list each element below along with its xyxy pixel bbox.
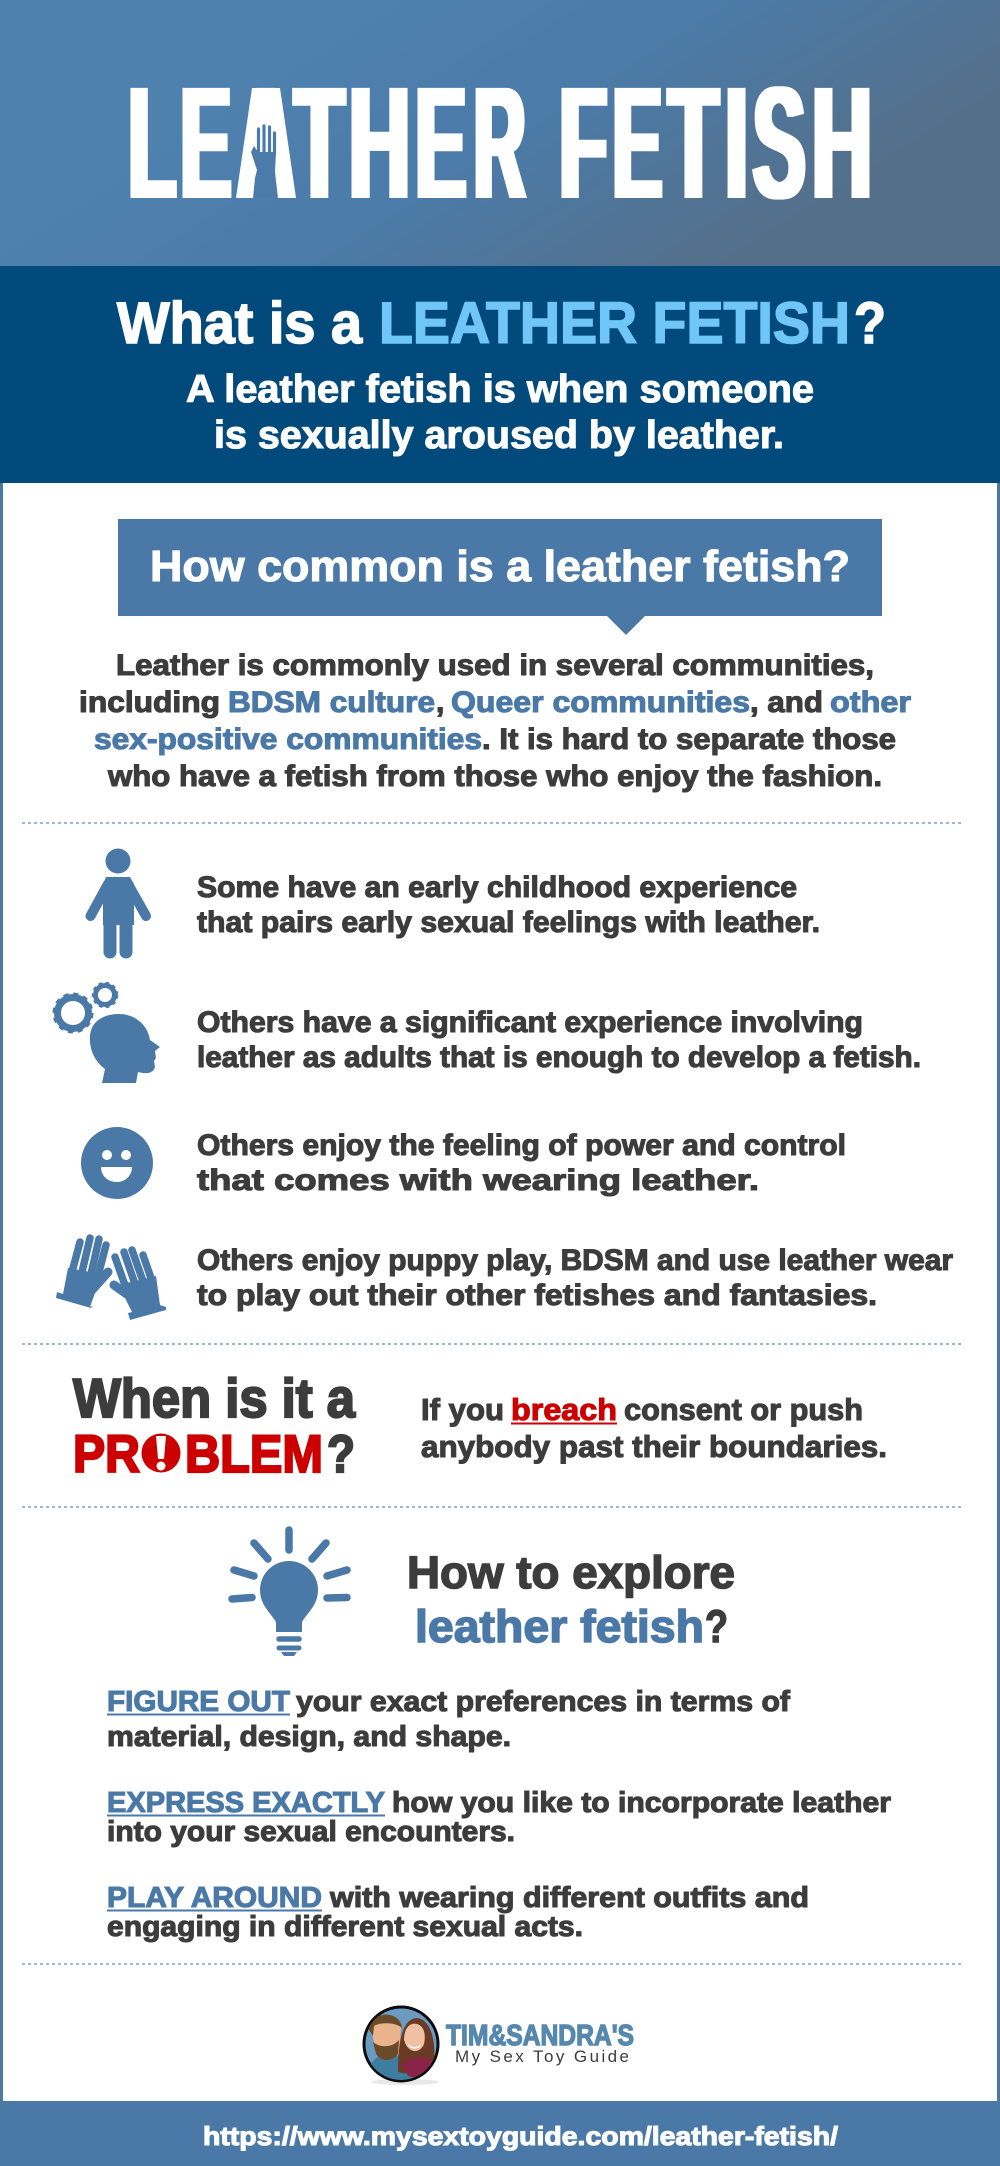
heading: what is a leather fetish (117, 291, 886, 356)
tip: figure out: material, design, and shape. (107, 1721, 511, 1753)
definition text: is sexually aroused by leather. (214, 414, 784, 457)
tip: figure out: your exact preferences in terms of (296, 1686, 790, 1718)
tip: express exactly: how you like to incorporate leather (392, 1787, 891, 1819)
item: childhood experience: that pairs early sexual feelings with leather. (197, 906, 820, 939)
footer URL bar (0, 2101, 1000, 2166)
text block: breach consent: breach (511, 1392, 617, 1427)
text block: breach consent: If you (421, 1392, 504, 1427)
heading: when is it a problem: PR (73, 1425, 140, 1484)
heading: when is it a problem: When is it a (73, 1367, 355, 1429)
text block: communities paragraph: Leather is commonly used in several communities, (116, 649, 874, 682)
logo portrait (364, 2007, 439, 2085)
definition text (186, 368, 814, 457)
icon: light bulb (232, 1530, 347, 1656)
text block: communities paragraph: , and (750, 686, 823, 719)
callout: how common: How common is a leather fetish? (150, 542, 850, 591)
text block: communities paragraph: other (830, 686, 911, 719)
title: A (239, 53, 293, 232)
title (128, 53, 872, 232)
text block: communities paragraph: . It is hard to separate those (482, 723, 896, 756)
title: L (128, 53, 176, 232)
definition text: A leather fetish is when someone (186, 368, 814, 411)
tip: express exactly: into your sexual encounters. (107, 1816, 515, 1848)
text block: communities paragraph: including (79, 686, 220, 719)
title: H (349, 53, 410, 232)
item: power and control (81, 1127, 846, 1199)
icon: head with gears (54, 984, 160, 1083)
title: T (294, 53, 345, 232)
icon: raised hand in letter A (251, 126, 278, 198)
definition panel (0, 266, 1000, 483)
text block: communities paragraph (79, 649, 911, 793)
title: I (725, 53, 748, 232)
icon: exclamation circle (142, 1434, 180, 1472)
text block: breach consent (421, 1392, 887, 1464)
item: adult experience: leather as adults that is enough to develop a fetish. (197, 1041, 921, 1074)
logo tagline: My Sex Toy Guide (455, 2047, 629, 2066)
heading: how to explore: leather fetish (415, 1601, 704, 1652)
heading: when is it a problem: ? (327, 1425, 355, 1484)
header banner (0, 0, 1000, 266)
text block: communities paragraph: Queer communities (451, 686, 750, 719)
icon: gloves (56, 1238, 166, 1320)
tip: play around: engaging in different sexual acts. (107, 1911, 583, 1943)
item: puppy play (56, 1238, 953, 1320)
text block: communities paragraph: BDSM culture (228, 686, 435, 719)
heading: when is it a problem: BLEM (185, 1425, 323, 1484)
tip: play around: with wearing different outfits and (329, 1882, 809, 1914)
tip: play around (107, 1882, 809, 1943)
heading: how to explore (407, 1547, 735, 1652)
title: H (812, 53, 872, 232)
heading: what is a leather fetish: What is a (117, 291, 363, 356)
footer URL bar: https://www.mysextoyguide.com/leather-fetish/ (203, 2121, 838, 2151)
text block: breach consent: consent or push (624, 1392, 863, 1427)
title: T (668, 53, 719, 232)
heading: what is a leather fetish: LEATHER FETISH (379, 291, 850, 356)
item: childhood experience (90, 848, 820, 952)
text block: communities paragraph: who have a fetish from those who enjoy the fashion. (107, 760, 882, 793)
icon: smiley face (81, 1127, 153, 1199)
callout: how common (118, 519, 882, 635)
heading: when is it a problem (73, 1367, 355, 1484)
title: E (415, 53, 466, 232)
title: E (612, 53, 662, 232)
item: adult experience: Others have a significant experience involving (197, 1006, 863, 1039)
logo: Tim and Sandra's (364, 2007, 634, 2085)
tip: express exactly (107, 1787, 891, 1848)
item: adult experience (54, 984, 921, 1083)
text block: breach consent: anybody past their boundaries. (421, 1429, 887, 1464)
icon: child (90, 848, 146, 952)
item: power and control: Others enjoy the feeling of power and control (197, 1129, 846, 1162)
title: E (180, 53, 231, 232)
title: S (753, 53, 806, 232)
title: F (559, 53, 607, 232)
item: puppy play: Others enjoy puppy play, BDSM and use leather wear (197, 1244, 953, 1277)
title: R (474, 53, 526, 232)
tip: figure out (107, 1686, 790, 1753)
text block: communities paragraph: sex-positive communities (94, 723, 482, 756)
item: childhood experience: Some have an early childhood experience (197, 871, 797, 904)
tip: figure out: FIGURE OUT (107, 1686, 290, 1718)
heading: what is a leather fetish: ? (854, 291, 886, 356)
heading: how to explore: How to explore (407, 1547, 735, 1598)
tip: play around: PLAY AROUND (107, 1882, 322, 1914)
item: puppy play: to play out their other fetishes and fantasies. (197, 1279, 877, 1312)
tip: express exactly: EXPRESS EXACTLY (107, 1787, 385, 1819)
heading: how to explore: ? (705, 1601, 728, 1652)
item: power and control: that comes with wearing leather. (197, 1164, 759, 1197)
text block: communities paragraph: , (436, 686, 444, 719)
logo wordmark: TIM&SANDRA'S (446, 2020, 634, 2052)
